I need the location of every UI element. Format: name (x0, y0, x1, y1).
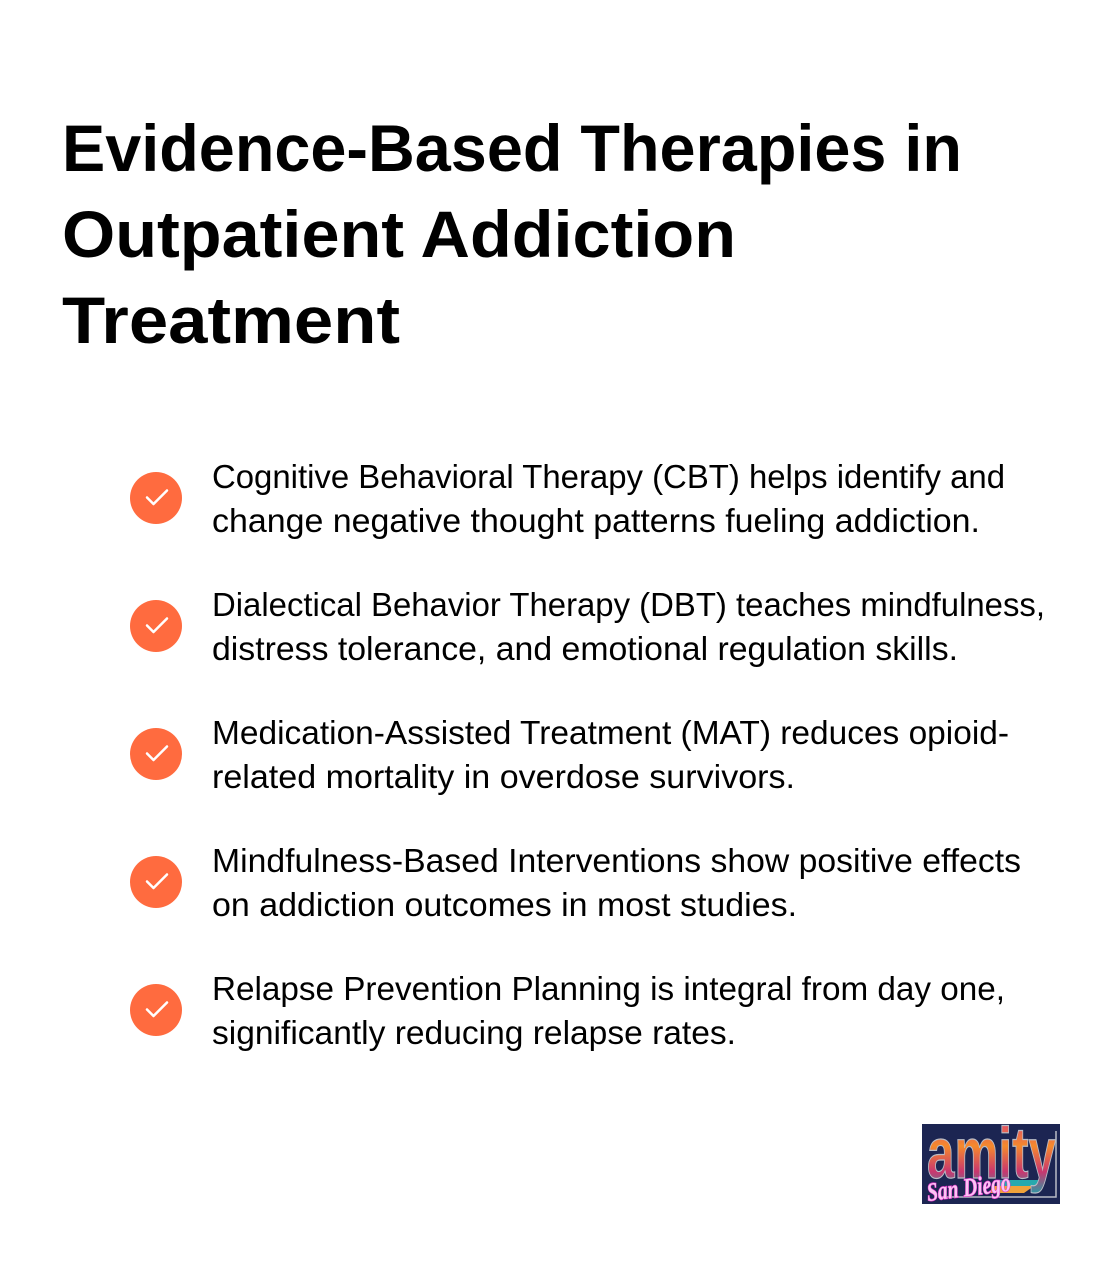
list item: CBT (130, 458, 1005, 539)
list item: MAT: Medication-Assisted Treatment (MAT) reduces opioid- (212, 714, 1009, 751)
logo: Amity San Diego (922, 1124, 1060, 1204)
list item: MAT: related mortality in overdose survivors. (212, 758, 795, 795)
title: Outpatient Addiction (62, 197, 736, 271)
list item: relapse prevention: significantly reducing relapse rates. (212, 1014, 736, 1051)
title (62, 111, 962, 357)
list item: DBT: distress tolerance, and emotional regulation skills. (212, 630, 958, 667)
list item: mindfulness: on addiction outcomes in most studies. (212, 886, 797, 923)
list item: relapse prevention (130, 970, 1005, 1051)
logo: Amity San Diego: amity (927, 1114, 1056, 1194)
list item: CBT: Cognitive Behavioral Therapy (CBT) helps identify and (212, 458, 1005, 495)
list of therapies (130, 458, 1045, 1051)
list item: relapse prevention: Relapse Prevention Planning is integral from day one, (212, 970, 1005, 1007)
title: Evidence-Based Therapies in (62, 111, 962, 185)
list item: mindfulness: Mindfulness-Based Interventions show positive effects (212, 842, 1021, 879)
list item: mindfulness (130, 842, 1021, 923)
list item: MAT (130, 714, 1009, 795)
list item: DBT (130, 586, 1045, 667)
list item: CBT: change negative thought patterns fueling addiction. (212, 502, 980, 539)
list item: DBT: Dialectical Behavior Therapy (DBT) teaches mindfulness, (212, 586, 1045, 623)
logo: Amity San Diego: San Diego (925, 1168, 1012, 1207)
title: Treatment (62, 283, 400, 357)
